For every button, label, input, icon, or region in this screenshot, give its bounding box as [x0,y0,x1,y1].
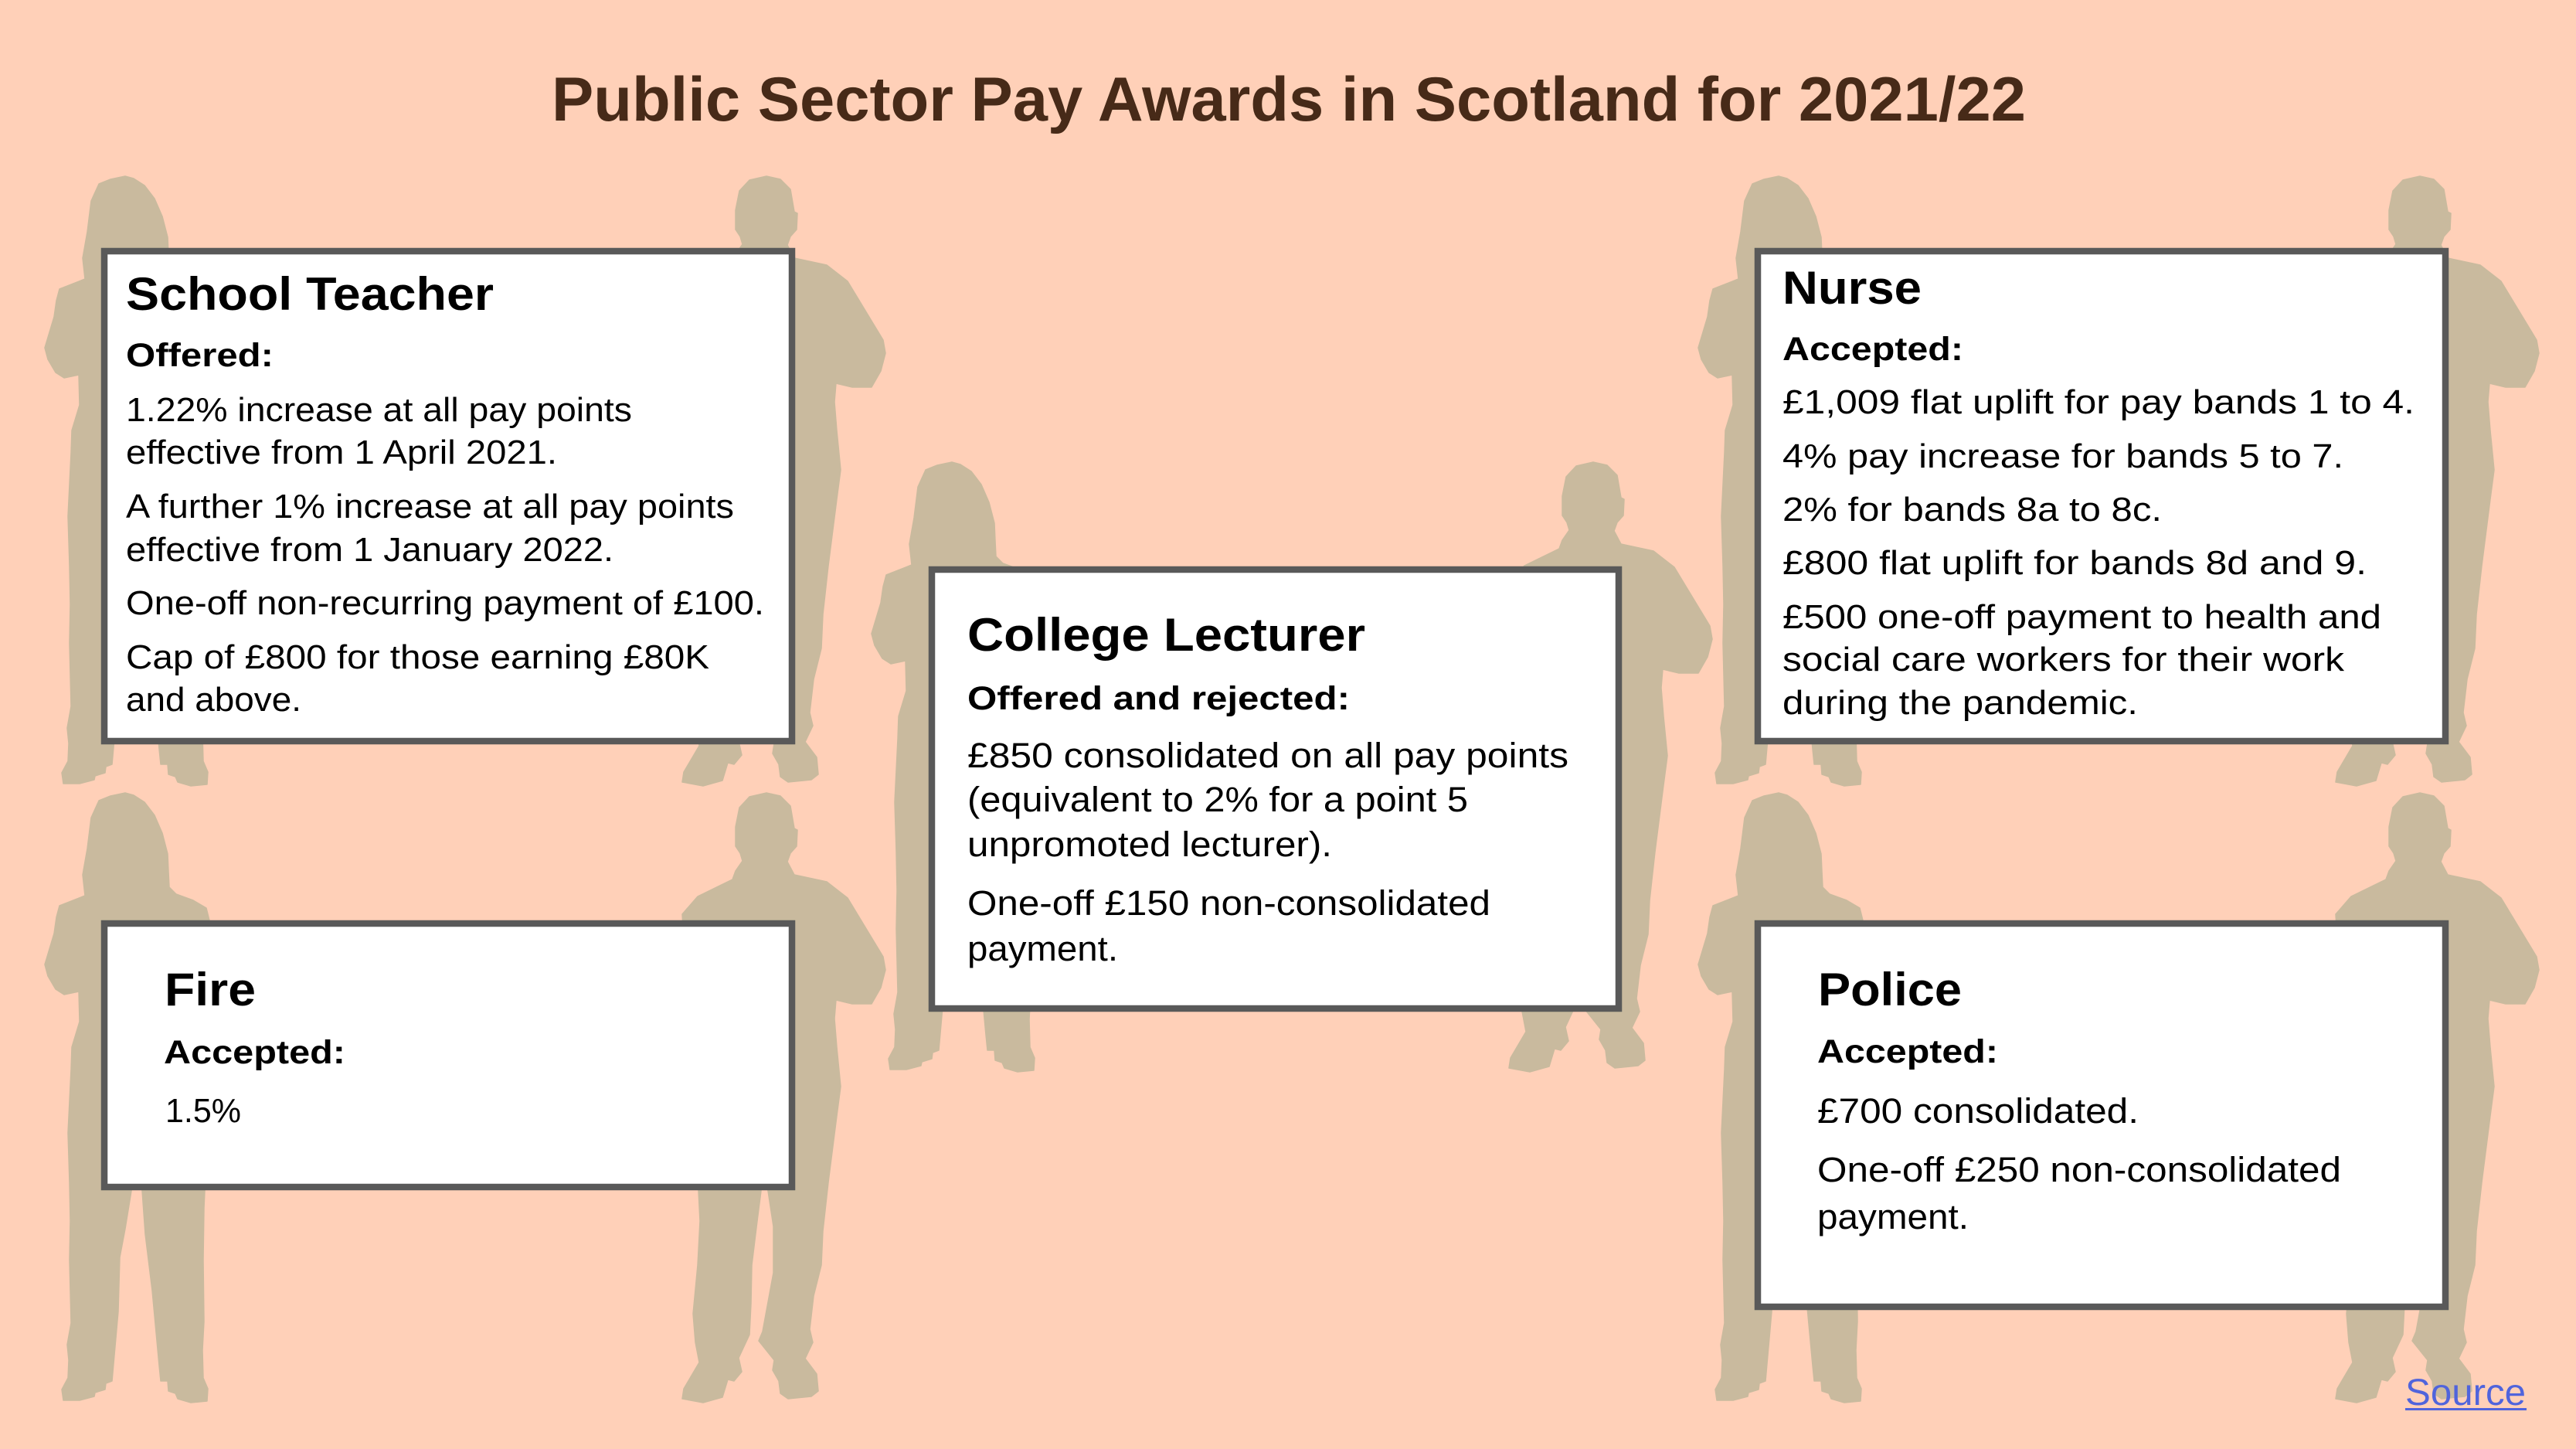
heading: college lecturer: College Lecturer [967,609,1365,661]
body text: college lecturer terms: payment. [967,929,1118,968]
source link: Source [2405,1372,2526,1413]
body text: school teacher terms: A further 1% increase at all pay points [126,488,734,526]
heading: nurse: Nurse [1782,262,1922,314]
body text: nurse terms: £800 flat uplift for bands 8d and 9. [1782,544,2367,582]
body text: school teacher terms: effective from 1 January 2022. [126,531,613,569]
body text: nurse terms: £500 one-off payment to health and [1782,598,2381,636]
body text: nurse terms: during the pandemic. [1782,684,2138,722]
body text: school teacher terms: One-off non-recurring payment of £100. [126,584,764,622]
body text: college lecturer terms: One-off £150 non-consolidated [967,883,1490,923]
body text: college lecturer terms: £850 consolidated on all pay points [967,736,1568,775]
body text: nurse terms: 4% pay increase for bands 5 to 7. [1782,437,2343,475]
body text: school teacher terms [126,391,764,719]
status: accepted: Accepted: [1782,331,1963,368]
silhouettes: people holding nurse card [1698,176,2539,786]
body text: police terms: payment. [1817,1197,1969,1236]
heading: fire: Fire [165,964,256,1015]
panel: nurse [1758,251,2445,741]
body text: college lecturer terms: unpromoted lecturer). [967,825,1332,864]
panel: fire [104,923,792,1187]
body text: school teacher terms: and above. [126,681,301,719]
status: offered: Offered: [126,337,274,374]
status: offered and rejected: Offered and rejected: [967,680,1350,717]
panel: police [1758,923,2445,1307]
body text: nurse terms: 2% for bands 8a to 8c. [1782,491,2162,529]
body text: nurse terms: £1,009 flat uplift for pay bands 1 to 4. [1782,383,2415,421]
silhouettes: people holding fire card [45,793,885,1403]
body text: school teacher terms: Cap of £800 for those earning £80K [126,638,709,676]
panel: college lecturer [932,570,1619,1009]
body text: police terms: One-off £250 non-consolidated [1817,1150,2341,1189]
heading: school teacher: School Teacher [126,268,494,320]
status: accepted: Accepted: [164,1034,345,1071]
panel: school teacher [104,251,792,741]
title: Public Sector Pay Awards in Scotland for 2021/22 [552,65,2026,134]
status: accepted: Accepted: [1817,1033,1998,1070]
silhouettes: people holding school teacher card [45,176,885,786]
body text: nurse terms: social care workers for their work [1782,641,2345,679]
body text: police terms [1817,1091,2341,1236]
body text: nurse terms [1782,383,2415,722]
heading: police: Police [1818,964,1962,1015]
body text: school teacher terms: effective from 1 April 2021. [126,434,557,471]
body text: police terms: £700 consolidated. [1817,1091,2139,1131]
body text: college lecturer terms: (equivalent to 2% for a point 5 [967,780,1468,819]
silhouettes: people holding police card [1698,793,2539,1403]
silhouettes: people holding college lecturer card [872,462,1712,1072]
body text: college lecturer terms [967,736,1568,968]
body text: school teacher terms: 1.22% increase at all pay points [126,391,632,429]
body text: fire terms: 1.5% [165,1092,241,1130]
